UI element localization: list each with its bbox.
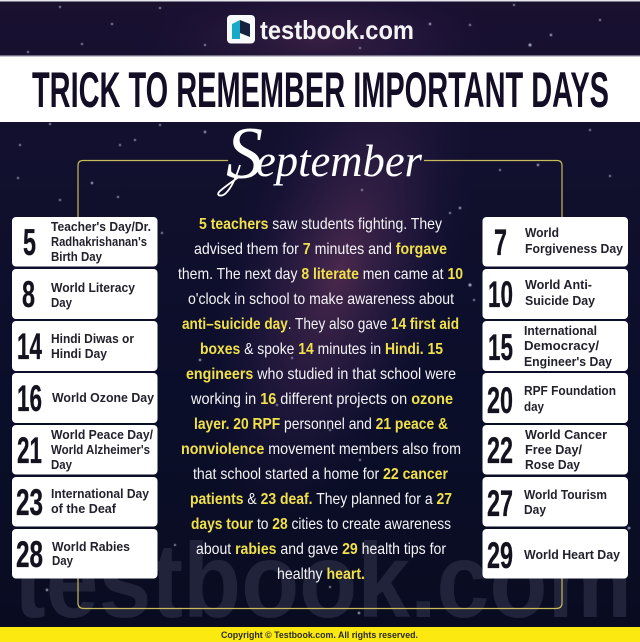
card: 22 World Cancer Free Day / Rose Day — [482, 425, 628, 474]
mnemonic story text: anti–suicide day. They also gave 14 first aid — [182, 316, 459, 333]
card: 22 World Cancer Free Day / Rose Day: 22 — [487, 430, 513, 471]
card: 23 International Day of the Deaf: International Day — [51, 487, 149, 501]
card: 15 International Democracy / Engineer's Day: Engineer's Day — [524, 355, 612, 369]
card: 8 World Literacy Day: Day — [51, 296, 72, 310]
card: 7 World Forgiveness Day: Forgiveness Day — [525, 242, 623, 256]
mnemonic story text: that school started a home for 22 cancer — [193, 466, 448, 483]
card: 28 World Rabies Day: World Rabies — [52, 540, 130, 554]
card: 10 World Anti-Suicide Day — [482, 269, 628, 319]
card: 7 World Forgiveness Day — [482, 217, 628, 266]
card: 5 Teacher's Day: Radhakrishanan's — [51, 235, 147, 249]
mnemonic story text: boxes & spoke 14 minutes in Hindi. 15 — [200, 341, 443, 358]
card: 14 Hindi Diwas — [12, 321, 158, 371]
card: 14 Hindi Diwas: Hindi Day — [51, 347, 107, 361]
card: 27 World Tourism Day: World Tourism — [524, 488, 607, 502]
card: 5 Teacher's Day: 5 — [23, 222, 36, 263]
card: 5 Teacher's Day: Birth Day — [51, 250, 102, 264]
mnemonic story text: layer. 20 RPF personnel and 21 peace & — [194, 416, 448, 433]
mnemonic story text: 5 teachers saw students fighting. They — [199, 216, 442, 233]
copyright text: Copyright © Testbook.com. All rights reserved. — [221, 630, 418, 641]
mnemonic story text: about rabies and gave 29 health tips for — [196, 541, 447, 558]
mnemonic story text: healthy heart. — [277, 566, 365, 583]
card: 10 World Anti-Suicide Day: Suicide Day — [525, 294, 595, 308]
footer bar — [0, 627, 640, 642]
mnemonic story text — [178, 216, 463, 583]
card: 21 World Peace Day — [12, 425, 158, 474]
logo wordmark: testbook.com — [260, 15, 414, 45]
card: 5 Teacher's Day — [12, 217, 158, 266]
card: 21 World Peace Day: 21 — [17, 430, 42, 471]
heading: September: eptember — [256, 135, 423, 186]
card: 8 World Literacy Day: World Literacy — [51, 281, 135, 295]
card: 23 International Day of the Deaf: 23 — [16, 482, 43, 523]
card: 20 RPF Foundation day: day — [524, 400, 544, 414]
card: 5 Teacher's Day: Teacher's Day/Dr. — [51, 220, 151, 234]
mnemonic story text: advised them for 7 minutes and forgave — [194, 241, 447, 258]
card: 27 World Tourism Day — [482, 477, 628, 526]
card: 20 RPF Foundation day: RPF Foundation — [524, 384, 616, 398]
card: 7 World Forgiveness Day: 7 — [494, 222, 507, 263]
card: 27 World Tourism Day: Day — [524, 503, 546, 517]
card: 7 World Forgiveness Day: World — [525, 226, 559, 240]
card: 28 World Rabies Day: 28 — [16, 534, 43, 575]
card: 22 World Cancer Free Day / Rose Day: Rose Day — [525, 458, 580, 472]
card: 22 World Cancer Free Day / Rose Day: World Cancer — [525, 428, 607, 442]
card: 29 World Heart Day: 29 — [487, 535, 513, 576]
left column of date cards — [12, 217, 158, 578]
gold frame — [78, 160, 562, 608]
card: 15 International Democracy / Engineer's Day — [482, 321, 628, 371]
right column of date cards — [482, 217, 628, 578]
card: 21 World Peace Day: World Alzheimer's — [51, 443, 150, 457]
card: 10 World Anti-Suicide Day: World Anti- — [525, 278, 592, 292]
mnemonic story text: nonviolence movement members also from — [181, 441, 461, 458]
card: 15 International Democracy / Engineer's Day: 15 — [488, 327, 513, 368]
card: 23 International Day of the Deaf — [12, 477, 158, 526]
mnemonic story text: them. The next day 8 literate men came at 10 — [178, 266, 463, 283]
card: 8 World Literacy Day — [12, 269, 158, 319]
card: 29 World Heart Day — [482, 529, 628, 578]
card: 28 World Rabies Day — [12, 529, 158, 578]
card: 20 RPF Foundation day: 20 — [487, 380, 513, 421]
card: 28 World Rabies Day: Day — [52, 554, 73, 568]
card: 15 International Democracy / Engineer's Day: Democracy/ — [524, 339, 600, 353]
card: 16 World Ozone Day: World Ozone Day — [52, 391, 154, 405]
card: 29 World Heart Day: World Heart Day — [524, 548, 620, 562]
mnemonic story text: working in 16 different projects on ozone — [190, 391, 453, 408]
icon: book — [227, 15, 255, 44]
mnemonic story text: engineers who studied in that school were — [186, 366, 456, 383]
card: 14 Hindi Diwas: Hindi Diwas or — [51, 332, 134, 346]
heading: September: S — [226, 113, 263, 195]
card: 16 World Ozone Day: 16 — [17, 378, 42, 419]
card: 23 International Day of the Deaf: of the Deaf — [51, 502, 117, 516]
card: 10 World Anti-Suicide Day: 10 — [488, 274, 513, 315]
title banner — [0, 56, 640, 122]
card: 20 RPF Foundation day — [482, 373, 628, 423]
card: 14 Hindi Diwas: 14 — [17, 326, 42, 367]
mnemonic story text: patients & 23 deaf. They planned for a 27 — [190, 491, 452, 508]
heading: September — [218, 113, 423, 196]
mnemonic story text: days tour to 28 cities to create awareness — [191, 516, 451, 533]
card: 27 World Tourism Day: 27 — [487, 483, 513, 524]
card: 8 World Literacy Day: 8 — [22, 274, 35, 315]
card: 21 World Peace Day: Day — [51, 458, 72, 472]
card: 15 International Democracy / Engineer's Day: International — [524, 324, 597, 338]
card: 21 World Peace Day: World Peace Day/ — [51, 428, 154, 442]
mnemonic story text: o'clock in school to make awareness about — [188, 291, 454, 308]
logo: testbook.com — [227, 15, 414, 45]
card: 22 World Cancer Free Day / Rose Day: Free Day/ — [525, 443, 583, 457]
card: 16 World Ozone Day — [12, 373, 158, 423]
